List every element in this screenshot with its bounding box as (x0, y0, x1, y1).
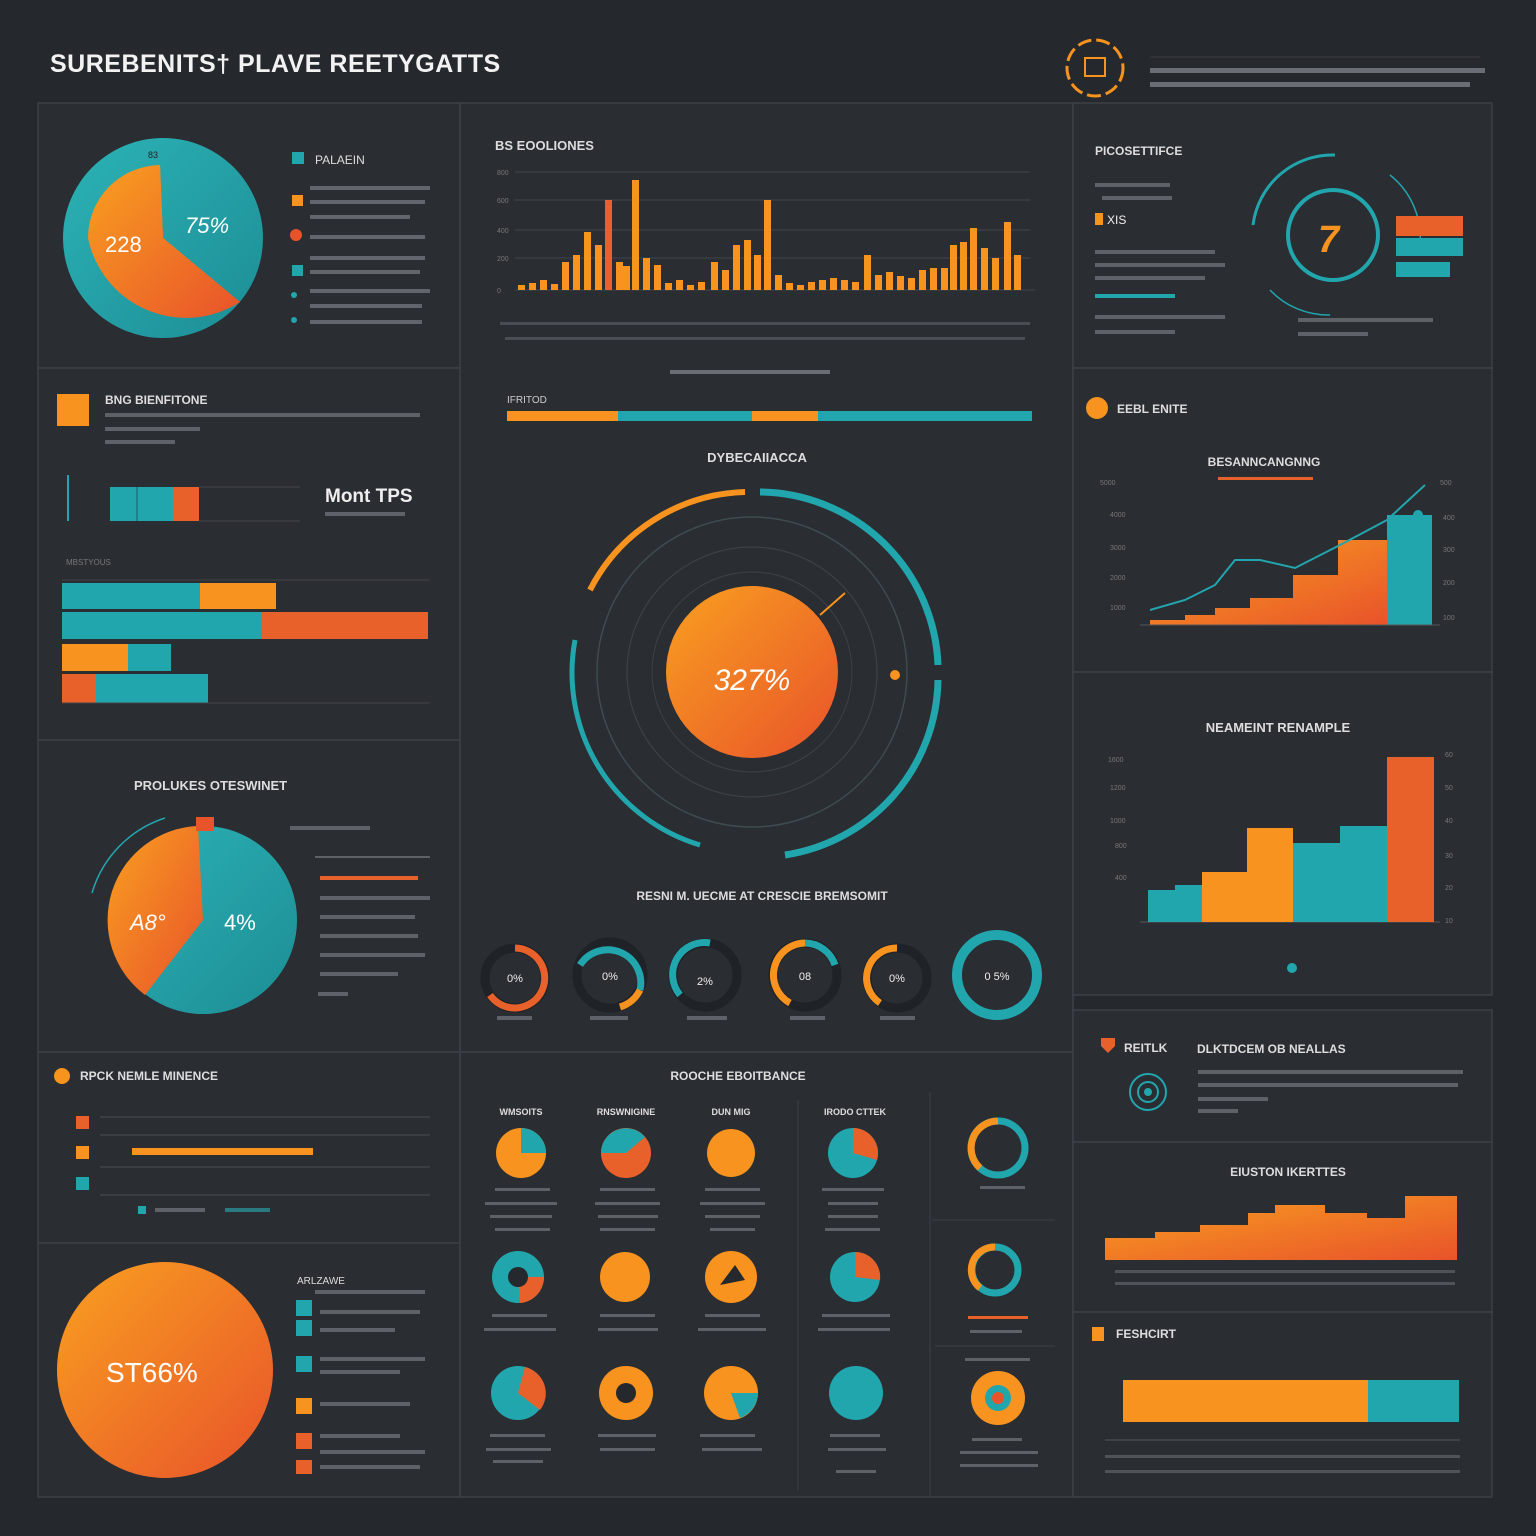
mini bar chart (68, 475, 300, 521)
area chart: 1000 (1110, 605, 1126, 612)
legend (290, 152, 430, 324)
heading: PROLUKES OTESWINET (134, 778, 287, 793)
area chart: 2000 (1110, 575, 1126, 582)
step chart (1105, 1196, 1457, 1285)
panel: bottom middle grid: DUN MIG (712, 1107, 750, 1117)
heading: EIUSTON IKERTTES (1230, 1165, 1346, 1179)
bar chart: 1000 (1110, 818, 1126, 825)
header description text (1150, 68, 1485, 87)
heading: BS EOOLIONES (495, 138, 594, 153)
big circle: ST66% (106, 1357, 198, 1388)
area chart: 100 (1443, 615, 1455, 622)
panel: big orange circle (57, 1262, 425, 1478)
bar chart: 20 (1445, 885, 1453, 892)
pie chart (92, 817, 297, 1014)
bar chart: 10 (1445, 918, 1453, 925)
legend: PALAEIN (315, 153, 365, 167)
heading: BNG BIENFITONE (105, 393, 207, 407)
pie chart: 75% (185, 213, 229, 238)
heading: EEBL ENITE (1117, 402, 1187, 416)
panel: bar growth (57, 393, 430, 703)
heading: DLKTDCEM OB NEALLAS (1197, 1042, 1346, 1056)
text: 08 (799, 971, 811, 983)
area chart: 4000 (1110, 512, 1126, 519)
area chart: 400 (1443, 515, 1455, 522)
icon grid (491, 1121, 1025, 1425)
panel: rpck (54, 1068, 430, 1214)
panel: pie 2 (92, 778, 430, 1014)
panel: top bar chart: 800 (497, 170, 509, 177)
icon: shield (1101, 1038, 1115, 1053)
bar chart: 40 (1445, 818, 1453, 825)
bar chart: 50 (1445, 785, 1453, 792)
donut row (485, 935, 1037, 1015)
panel: bottom middle grid: RNSWNIGINE (597, 1107, 655, 1117)
panel: bar growth: MBSTYOUS (66, 558, 111, 567)
pie chart: 83 (148, 150, 158, 160)
legend (296, 1276, 425, 1474)
panel: right alert: REITLK (1124, 1041, 1168, 1055)
panel: right alert (1101, 1038, 1463, 1113)
chart: central gauge: 327% (714, 664, 790, 697)
heading: NEAMEINT RENAMPLE (1206, 720, 1351, 735)
progress bar (507, 395, 1032, 421)
pie chart: A8° (128, 910, 166, 935)
heading: PICOSETTIFCE (1095, 144, 1182, 158)
bar chart (1108, 752, 1453, 973)
panel: bottom middle grid: IRODO CTTEK (824, 1107, 886, 1117)
chart: central gauge (572, 492, 938, 855)
area chart: 3000 (1110, 545, 1126, 552)
pie chart: 4% (224, 910, 256, 935)
panel: right bar chart (1108, 720, 1453, 973)
panel: right gauge (1095, 144, 1463, 336)
pie chart: 228 (105, 232, 142, 257)
text: 2% (697, 976, 713, 988)
text: 0% (602, 971, 618, 983)
legend: ARLZAWE (297, 1276, 345, 1287)
area chart: 200 (1443, 580, 1455, 587)
text: 0 5% (984, 971, 1010, 983)
area chart: 500 (1440, 480, 1452, 487)
area chart (1100, 480, 1455, 625)
icon: logo (1067, 40, 1123, 96)
title: SUREBENITS† PLAVE REETYGATTS (50, 50, 501, 78)
panel: right area chart (1086, 397, 1455, 625)
panel: right gauge: XIS (1107, 213, 1126, 227)
big circle (57, 1262, 273, 1478)
progress bar: IFRITOD (507, 395, 547, 406)
area chart: 5000 (1100, 480, 1116, 487)
icon (1092, 1327, 1104, 1341)
icon (1086, 397, 1108, 419)
heading: RPCK NEMLE MINENCE (80, 1069, 218, 1083)
panel: top bar chart: 400 (497, 228, 509, 235)
panel: right step area (1105, 1165, 1457, 1285)
panel: bottom middle grid (484, 1069, 1055, 1497)
bar (76, 1116, 313, 1214)
heading: ROOCHE EBOITBANCE (670, 1069, 806, 1083)
gauge (1253, 155, 1420, 315)
bar chart (518, 180, 1021, 290)
area chart: 300 (1443, 547, 1455, 554)
heading: FESHCIRT (1116, 1327, 1177, 1341)
panel: top-left pie (63, 138, 430, 338)
panel: top bar chart: 200 (497, 256, 509, 263)
panel: top bar chart (495, 138, 1035, 374)
icon (54, 1068, 70, 1084)
text: 0% (889, 973, 905, 985)
pie chart (63, 138, 263, 338)
text: 0% (507, 973, 523, 985)
icon: target (1130, 1074, 1166, 1110)
heading: center gauge: DYBECAIIACCA (707, 450, 807, 465)
horizontal bar chart (62, 580, 430, 703)
bar chart: 30 (1445, 853, 1453, 860)
subheading: RESNI M. UECME AT CRESCIE BREMSOMIT (636, 889, 888, 903)
panel: top bar chart: 0 (497, 288, 501, 295)
bar (1105, 1380, 1460, 1473)
bar chart: 1200 (1110, 785, 1126, 792)
icon: orange square (57, 394, 89, 426)
panel: top bar chart: 600 (497, 198, 509, 205)
bar chart: 400 (1115, 875, 1127, 882)
bar chart: 1600 (1108, 757, 1124, 764)
callout: Mont TPS: Mont TPS (325, 486, 413, 507)
bars (1396, 216, 1463, 277)
panel: bottom middle grid: WMSOITS (500, 1107, 542, 1117)
panel: right area chart: BESANNCANGNNG (1208, 455, 1320, 469)
bar chart: 60 (1445, 752, 1453, 759)
panel: right stacked bar (1092, 1327, 1460, 1473)
gauge: 7 (1318, 219, 1341, 261)
bar chart: 800 (1115, 843, 1127, 850)
legend text (290, 826, 430, 996)
